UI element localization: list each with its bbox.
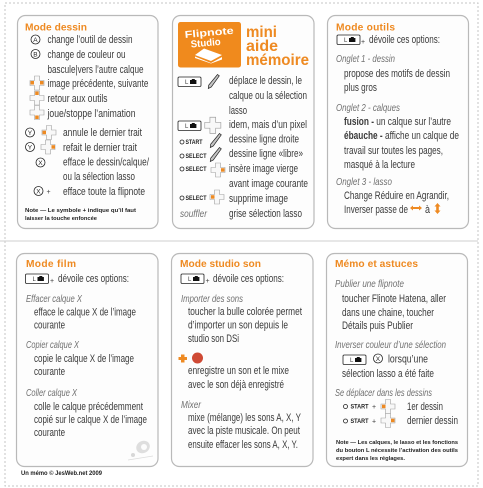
text: devoile: dévoile ces options: <box>369 34 440 46</box>
text: dessin A and B buttons <box>48 34 144 76</box>
icon: button A: A <box>33 37 38 44</box>
text: dessin d-pad actions: retour aux outils <box>48 93 108 105</box>
text: onglet 3 <box>336 176 449 216</box>
text: coller calque: Coller calque X <box>26 387 78 399</box>
icon: L button <box>343 355 366 364</box>
heading: mode dessin: Mode dessin <box>25 22 87 34</box>
text: importer des sons: studio son DSi <box>188 333 239 345</box>
icon: button B: B <box>33 52 38 58</box>
panel: mode studio son <box>172 254 313 466</box>
logo: Flipnote Studio <box>178 22 241 68</box>
text: shortcuts: déplace le dessin, le <box>229 75 302 87</box>
icon: button A <box>31 35 40 44</box>
text: inverser couleur: sélection lasso a été faite <box>342 368 434 380</box>
text: coller calque: courante <box>34 427 65 439</box>
icon: red record button <box>192 352 203 364</box>
icon: d-pad left right <box>30 76 44 90</box>
icon: d-pad down <box>30 106 44 120</box>
heading: mode outils: Mode outils <box>336 22 395 34</box>
text: mixer <box>181 399 301 451</box>
text: shortcuts: insère image vierge <box>229 163 298 175</box>
panel: memo et astuces <box>326 254 468 466</box>
icon: X plus <box>34 186 51 196</box>
text: dessin combos: refait le dernier trait <box>63 142 137 154</box>
text: onglet 1: propose des motifs de dessin <box>344 68 450 80</box>
note <box>336 440 458 462</box>
text: shortcuts: dessine ligne «libre» <box>229 148 303 160</box>
text: importer des sons: Importer des sons <box>181 293 244 305</box>
text: inverser couleur: lorsqu’une <box>388 354 428 366</box>
text: publier: dans une chaine, toucher <box>342 307 434 319</box>
icon: START plus d-pad left: START <box>350 404 369 410</box>
icon: SELECT and d-pad left <box>180 190 224 204</box>
text: shortcuts: idem, mais d’un pixel <box>229 119 307 131</box>
text: coller calque <box>26 387 147 439</box>
note <box>25 208 136 222</box>
text: publier: Détails puis Publier <box>342 320 413 332</box>
text: onglet 3: Onglet 3 - lasso <box>336 176 392 188</box>
text: onglet 2: ébauche - affiche un calque de <box>344 130 459 142</box>
text: onglet 3: à <box>425 204 431 216</box>
logo: Flipnote Studio: Flipnote <box>184 26 235 41</box>
text: mixer: mixe (mélange) les sons A, X, Y <box>188 412 301 424</box>
text: onglet 2 <box>336 102 459 171</box>
text: copier calque: courante <box>34 366 65 378</box>
title: mini aide memoire: mémoire <box>246 52 309 69</box>
text: souffler: souffler <box>180 208 207 220</box>
text: dessin labels: 1er dessin <box>407 401 443 413</box>
icon: L button plus <box>337 35 365 46</box>
icon: L button and d-pad <box>178 117 221 133</box>
text: importer des sons: d’importer un son depuis le <box>188 320 288 332</box>
heading: memo et astuces: Mémo et astuces <box>335 259 418 270</box>
icon: START plus d-pad left: + <box>372 404 376 411</box>
icon: Y + right: Y <box>28 144 33 152</box>
icon: X <box>36 158 45 167</box>
text: shortcuts: supprime image <box>229 193 288 205</box>
icon: L button plus: + <box>206 278 210 285</box>
icon: Y + left <box>26 126 56 140</box>
icon: START and stylus <box>180 134 221 148</box>
text: dessin A and B buttons: change l’outil de dessin <box>48 34 132 46</box>
text: mixer: ensuite effacer les sons A, X, Y. <box>188 439 298 451</box>
icon: START plus d-pad right <box>344 414 395 428</box>
icon: SELECT and stylus: SELECT <box>186 154 207 160</box>
heading: mode film: Mode film <box>26 259 76 270</box>
icon: d-pad up <box>30 91 44 105</box>
text: enregistre: enregistre un son et le mixe <box>188 365 289 377</box>
panel: mode dessin <box>18 16 158 228</box>
text: onglet 1 <box>336 53 450 94</box>
icon: Y + right <box>26 140 55 154</box>
note: expert dans les réglages. <box>336 456 405 462</box>
icon: SELECT and d-pad right <box>180 163 225 177</box>
text: enregistre <box>188 365 289 391</box>
icon: X: X <box>38 160 43 167</box>
text: se deplacer: Se déplacer dans les dessins <box>335 387 433 399</box>
text: effacer calque: courante <box>34 320 65 332</box>
text: dessin combos <box>63 127 150 198</box>
icon: L button plus <box>181 274 210 285</box>
text: importer des sons: toucher la bulle colorée permet <box>188 306 302 318</box>
text: copier calque: copie le calque X de l’image <box>34 353 134 365</box>
text: enregistre: avec le son déjà enregistré <box>188 379 284 391</box>
text: onglet 2: masqué à la lecture <box>344 159 415 171</box>
text: shortcuts: avant image courante <box>229 178 308 190</box>
icon: SELECT and d-pad right: SELECT <box>186 167 207 173</box>
text: shortcuts: lasso <box>229 105 247 117</box>
icon: horizontal arrow <box>410 206 422 210</box>
text: publier <box>335 278 446 332</box>
note: du bouton L nécessite l’activation des outils <box>336 448 458 454</box>
text: inverser couleur: Inverser couleur d’une sélection <box>335 339 446 351</box>
text: shortcuts: dessine ligne droite <box>229 134 299 146</box>
title: mini aide memoire: mini <box>246 24 277 41</box>
text: mixer: avec la piste musicale. On peut <box>188 425 300 437</box>
text: onglet 1: Onglet 1 - dessin <box>336 53 395 65</box>
text: onglet 1: plus gros <box>344 82 377 94</box>
text: mixer: Mixer <box>181 399 201 411</box>
text: dessin combos: efface le dessin/calque/ <box>63 156 150 168</box>
text: shortcuts: grise sélection lasso <box>229 208 302 220</box>
text: dessin labels: dernier dessin <box>407 415 458 427</box>
icon: L button plus: + <box>361 39 365 46</box>
panel: mini aide memoire <box>172 16 314 228</box>
text: copier calque: Copier calque X <box>26 339 80 351</box>
logo: Flipnote Studio: Studio <box>190 37 221 50</box>
text: onglet 2: travail sur toutes les pages, <box>344 145 443 157</box>
text: effacer calque <box>26 293 136 332</box>
icon: START plus d-pad right: + <box>372 418 376 426</box>
text: dessin combos: ou la sélection lasso <box>63 171 135 183</box>
text: dessin combos: annule le dernier trait <box>63 127 142 139</box>
icon: L button plus: + <box>50 278 54 285</box>
text: onglet 3: Inverser passe de <box>344 204 408 216</box>
text: dessin combos: efface toute la flipnote <box>63 186 145 198</box>
panel: mode outils <box>328 16 468 228</box>
text: shortcuts <box>229 75 308 220</box>
icon: orange plus <box>178 354 187 362</box>
text: dessin d-pad actions: image précédente, suivante <box>48 78 148 90</box>
text: coller calque: colle le calque précédemment <box>34 401 143 413</box>
icon: L button and stylus <box>178 74 219 88</box>
text: dessin d-pad actions: joue/stoppe l’animation <box>47 108 136 120</box>
icon: button X: X <box>376 356 381 363</box>
text: copier calque <box>26 339 134 378</box>
heading: mode studio son: Mode studio son <box>180 259 261 270</box>
title: mini aide memoire: aide <box>246 38 278 55</box>
note: laisser la touche enfoncée <box>25 216 97 222</box>
panel: mode film <box>16 254 158 466</box>
icon: Y + left: Y <box>28 130 33 137</box>
icon: button X <box>374 354 382 363</box>
text: effacer calque: efface le calque X de l’image <box>34 306 136 318</box>
icon: START and stylus: START <box>186 140 203 146</box>
icon: button B <box>31 50 40 58</box>
credit: Un mémo © JesWeb.net 2009 <box>21 470 103 477</box>
text: coller calque: copié sur le calque X de l’image <box>34 414 147 426</box>
text: devoile: dévoile ces options: <box>213 273 284 285</box>
text: onglet 2: fusion - un calque sur l’autre <box>344 116 451 128</box>
icon: SELECT and stylus <box>180 148 221 162</box>
note: Note — Le symbole + indique qu’il faut <box>25 208 136 214</box>
text: dessin labels <box>407 401 458 427</box>
icon: L button plus <box>26 274 54 285</box>
text: importer des sons <box>181 293 302 345</box>
icon: START plus d-pad left <box>344 400 395 414</box>
text: devoile: dévoile ces options: <box>58 273 129 285</box>
icon: SELECT and d-pad left: SELECT <box>186 196 207 202</box>
text: dessin A and B buttons: bascule|vers l’autre calque <box>48 64 144 76</box>
text: shortcuts: calque ou la sélection <box>229 90 307 102</box>
icon: X plus: + <box>46 189 51 196</box>
icon: stylus watermark <box>128 438 153 460</box>
icon: X plus: X <box>36 188 41 196</box>
text: onglet 2: Onglet 2 - calques <box>336 102 401 114</box>
text: inverser couleur <box>335 339 446 380</box>
text: effacer calque: Effacer calque X <box>26 293 83 305</box>
text: publier: toucher Flinote Hatena, aller <box>342 293 446 305</box>
text: publier: Publier une flipnote <box>335 278 404 290</box>
icon: START plus d-pad right: START <box>350 419 369 425</box>
text: dessin A and B buttons: change de couleur ou <box>48 49 126 61</box>
note: Note — Les calques, le lasso et les fonctions <box>336 440 458 446</box>
text: onglet 3: Change Réduire en Agrandir, <box>344 190 449 202</box>
title: mini aide memoire <box>246 24 309 69</box>
text: dessin d-pad actions <box>47 78 148 120</box>
icon: vertical arrow <box>434 203 440 214</box>
